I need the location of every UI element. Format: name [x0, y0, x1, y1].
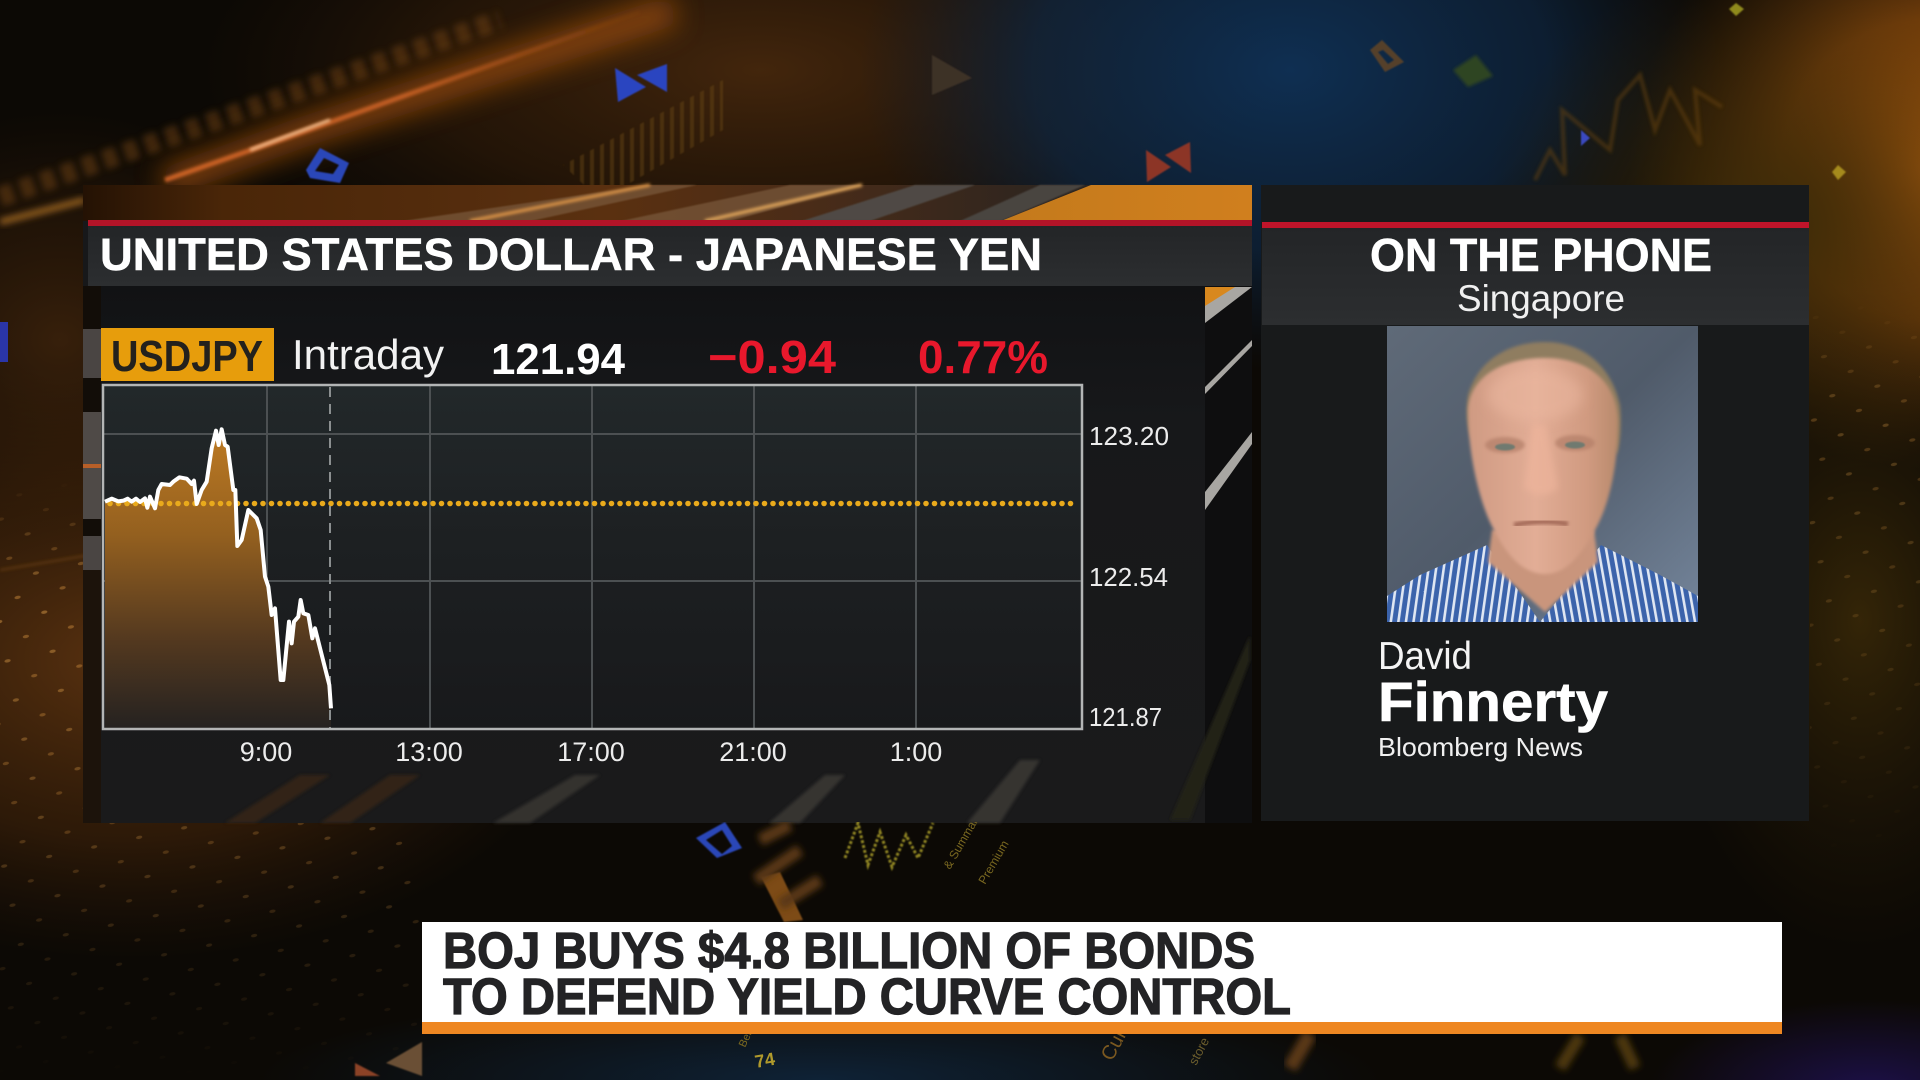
- left edge strip: [83, 286, 101, 823]
- name: David: David: [1378, 635, 1472, 678]
- percent change: 0.77%: [918, 331, 1048, 383]
- chart frame: [103, 385, 1082, 729]
- chart area background: [101, 286, 1205, 823]
- hair: [1467, 342, 1621, 455]
- icon: blue bowtie: [615, 64, 667, 102]
- nose: [1528, 430, 1556, 492]
- icon: grey triangle: [932, 55, 972, 95]
- range label: Intraday: [292, 331, 444, 378]
- header bar: [1262, 228, 1809, 325]
- heading: ON THE PHONE: [1370, 229, 1712, 281]
- grid lines: [104, 386, 1081, 729]
- background: lower graphics: 74: [753, 1049, 776, 1072]
- title: UNITED STATES DOLLAR - JAPANESE YEN: [100, 229, 1042, 280]
- icon: green diamond: [1453, 55, 1493, 87]
- net change: −0.94: [708, 331, 836, 383]
- background: lower graphics: Currency: [1097, 982, 1155, 1064]
- ticker badge: USDJPY: [111, 332, 263, 381]
- icon: blue hollow diamond: [306, 148, 349, 183]
- area fill: [105, 429, 331, 728]
- forehead highlight: [1490, 377, 1581, 413]
- icon: orange hollow diamond: [1370, 40, 1404, 72]
- panel: USDJPY chart panel: [83, 185, 1252, 823]
- prior close dotted line: [110, 501, 1078, 506]
- face: [1468, 358, 1618, 574]
- location: Singapore: [1457, 278, 1625, 319]
- icon: yellow markers: [1581, 3, 1846, 180]
- red rule: [88, 220, 1252, 226]
- background: lower graphics: [354, 822, 1642, 1077]
- title bar: [88, 226, 1252, 286]
- x axis labels: 21:00: [719, 737, 787, 767]
- x axis labels: 1:00: [890, 737, 942, 767]
- y axis labels: 122.54: [1089, 562, 1168, 592]
- background: lower graphics: Best Bid: [737, 1007, 765, 1049]
- icon: red bowtie: [1146, 142, 1191, 182]
- current time marker: [329, 387, 331, 729]
- background: lower graphics: & Summary in Yr: [940, 786, 998, 872]
- panel: on the phone: [1261, 185, 1809, 821]
- background: lower graphics: Premium: [975, 838, 1012, 886]
- x axis labels: 9:00: [240, 737, 292, 767]
- affiliation: Bloomberg News: [1378, 732, 1583, 762]
- lower third: headline: [422, 922, 1782, 1034]
- background: lower graphics: store: [1185, 1035, 1212, 1067]
- right graphic stripes: [1170, 286, 1252, 823]
- y axis labels: [1089, 421, 1169, 732]
- last price: 121.94: [491, 335, 626, 384]
- top graphic band: [83, 185, 1252, 221]
- line chart: [103, 385, 1082, 729]
- x axis labels: 13:00: [395, 737, 463, 767]
- red rule: [1262, 222, 1809, 228]
- name: Finnerty: Finnerty: [1378, 670, 1608, 733]
- x axis labels: 17:00: [557, 737, 625, 767]
- neck: [1488, 530, 1598, 612]
- price line: [105, 429, 331, 708]
- lower graphic stripes: [225, 760, 1040, 823]
- photo: David Finnerty portrait: [1387, 326, 1698, 622]
- y axis labels: 121.87: [1089, 702, 1162, 732]
- lower third: headline: BOJ BUYS $4.8 BILLION OF BONDS: [443, 922, 1255, 979]
- shirt: [1387, 545, 1698, 622]
- x axis labels: [240, 737, 942, 767]
- mouth: [1514, 522, 1568, 525]
- y axis labels: 123.20: [1089, 421, 1169, 451]
- lower third: headline: TO DEFEND YIELD CURVE CONTROL: [443, 968, 1291, 1025]
- eye sockets: [1485, 435, 1595, 453]
